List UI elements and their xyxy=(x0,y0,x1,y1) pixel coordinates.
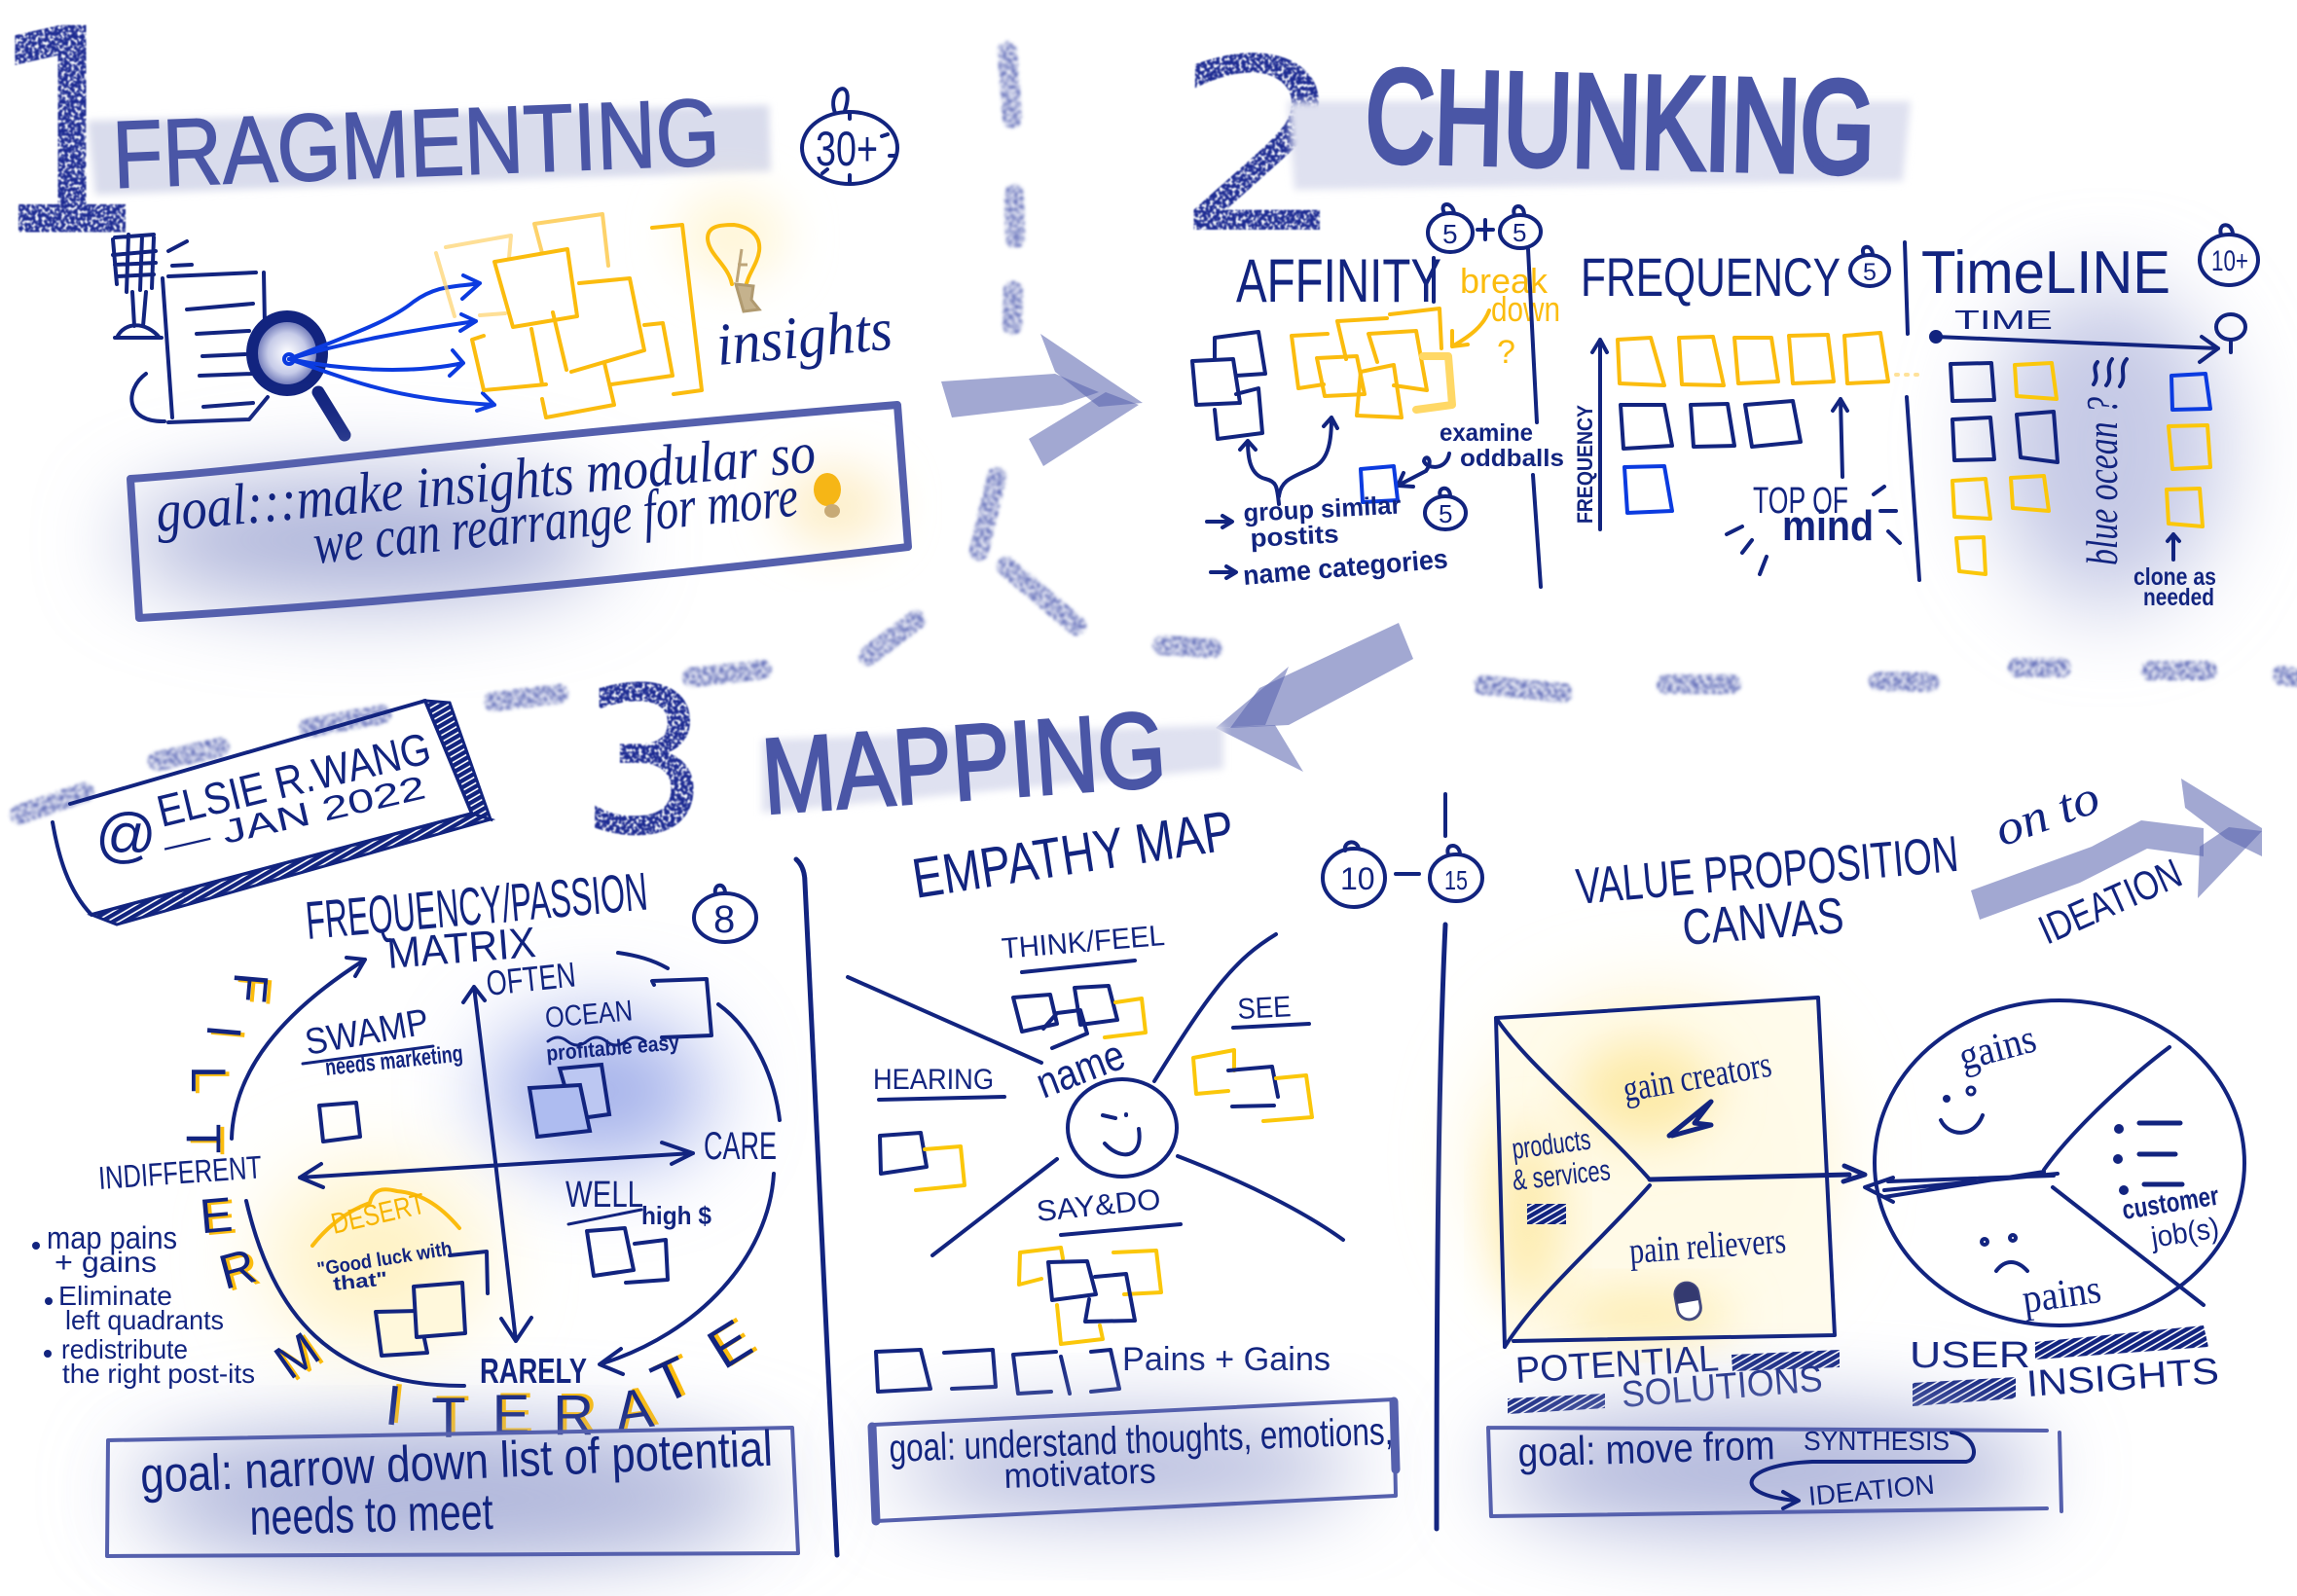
lettering: filter: L xyxy=(181,1066,236,1093)
value map square: products xyxy=(1511,1124,1592,1166)
arrows: insights extracted xyxy=(284,275,494,411)
credit banner: @ xyxy=(95,802,157,869)
icon: stopwatch 30+: 30+ xyxy=(816,122,878,176)
quadrant: ocean: profitable easy xyxy=(545,1030,681,1066)
goal callout 3c: IDEATION xyxy=(1807,1469,1936,1511)
list: filter steps: + gains xyxy=(55,1247,157,1279)
note: break down: ? xyxy=(1497,334,1515,371)
credit banner: ELSIE R.WANG xyxy=(152,722,435,837)
list: affinity steps: postits xyxy=(1250,519,1339,553)
lettering: iterate: A xyxy=(615,1374,661,1442)
note: top of mind: TOP OF xyxy=(1753,481,1848,522)
lettering: filter: I xyxy=(197,1023,251,1040)
quadrant: desert: that" xyxy=(332,1268,388,1295)
post-its: frequency navy row xyxy=(1621,401,1801,449)
note: break down: break xyxy=(1460,261,1549,301)
note: examine oddballs xyxy=(1398,419,1564,487)
quadrant: desert xyxy=(312,1188,488,1356)
arrow: step 1 to step 2 xyxy=(941,334,1143,466)
panel: step 3 mapping xyxy=(32,647,2262,1556)
post-its: yellow group xyxy=(1292,308,1452,417)
heading: value proposition canvas xyxy=(1574,826,1961,957)
icon: stopwatch 30+ xyxy=(802,89,897,184)
note: clone as needed: needed xyxy=(2143,584,2214,611)
stopwatch 8 xyxy=(694,886,756,942)
quadrant: well: WELL xyxy=(565,1175,643,1215)
note: top of mind xyxy=(1727,399,1900,574)
numeral 2: 2 xyxy=(1174,9,1347,286)
goal callout 3a xyxy=(107,1421,798,1556)
glow: iterate xyxy=(127,1431,788,1547)
axis labels: INDIFFERENT xyxy=(97,1148,263,1196)
list: filter steps: left quadrants xyxy=(65,1305,224,1335)
glow: insights bulb xyxy=(678,193,785,280)
goal callout 3a: needs to meet xyxy=(249,1484,494,1546)
note: break down xyxy=(1452,261,1560,371)
time axis: TIME xyxy=(1954,305,2053,335)
divider empathy / value proposition xyxy=(1437,925,1445,1529)
stopwatches 10 - 15: 10 xyxy=(1340,861,1375,896)
heading band xyxy=(1288,101,1911,190)
panel: step 2 chunking xyxy=(1174,9,2258,772)
user profile circle: gains xyxy=(1954,1017,2041,1080)
value map square: & services xyxy=(1511,1154,1612,1197)
post-it: blue oddball xyxy=(1361,466,1398,502)
glow: ocean quadrant xyxy=(488,1018,711,1164)
lettering: iterate: E xyxy=(697,1308,762,1381)
goal callout 1: goal:::make insights modular so xyxy=(153,420,818,544)
lettering: filter xyxy=(176,970,333,1392)
post-its: timeline navy xyxy=(1951,363,2058,462)
divider affinity / frequency xyxy=(1528,249,1541,587)
quadrant: swamp: SWAMP xyxy=(302,1001,432,1064)
post-its: yellow insight cluster xyxy=(436,214,702,417)
lettering: filter: R xyxy=(213,1238,262,1300)
background dashed divider strokes xyxy=(19,51,2297,815)
column: value proposition canvas xyxy=(1488,769,2262,1530)
icon: magnifying glass xyxy=(252,316,345,435)
lettering: iterate xyxy=(383,1306,766,1450)
arrow: on to ideation xyxy=(1971,769,2262,953)
post-it: frequency blue xyxy=(1624,466,1672,513)
stopwatch 5: 5 xyxy=(1439,499,1452,528)
note: break down: down xyxy=(1491,289,1560,329)
axis labels: OFTEN xyxy=(485,955,577,1003)
label: potential solutions: POTENTIAL xyxy=(1514,1338,1720,1392)
quadrant: ocean: OCEAN xyxy=(544,995,634,1034)
heading: mapping: MAPPING xyxy=(758,689,1170,837)
axis labels xyxy=(97,955,777,1391)
frequency axis: FREQUENCY xyxy=(1573,405,1597,524)
lettering: filter: T xyxy=(180,1126,235,1155)
matrix axes xyxy=(300,987,693,1341)
quadrant: swamp: needs marketing xyxy=(324,1040,464,1081)
lettering: iterate: T xyxy=(642,1344,701,1416)
stopwatch 5 xyxy=(1850,247,1889,286)
value map square: gain creators xyxy=(1620,1044,1774,1110)
stopwatch 5 xyxy=(1425,489,1466,529)
icon: timeline bulb xyxy=(2216,314,2245,352)
stopwatches 10 - 15: 15 xyxy=(1444,865,1468,895)
axis labels: RARELY xyxy=(480,1351,587,1391)
lettering: iterate: R xyxy=(553,1384,594,1447)
lettering: iterate: T xyxy=(435,1385,470,1448)
lettering: iterate: I xyxy=(383,1373,404,1438)
value map square xyxy=(1496,998,1865,1347)
heading: fragmenting: FRAGMENTING xyxy=(111,78,721,208)
quadrant: ocean xyxy=(529,979,711,1137)
numeral 3: 3 xyxy=(581,647,708,879)
arrow: step 2 to step 3 xyxy=(1216,623,1413,772)
glow: desert quadrant xyxy=(269,1170,483,1345)
spokes xyxy=(848,934,1343,1255)
quadrant: well xyxy=(565,1175,711,1283)
label: potential solutions xyxy=(1508,1338,1840,1416)
arrow: on to ideation: IDEATION xyxy=(2032,850,2188,953)
heading: frequency passion matrix xyxy=(304,861,650,978)
axis labels: CARE xyxy=(704,1125,777,1168)
lettering: iterate: T xyxy=(431,1387,466,1450)
label: user insights: USER xyxy=(1910,1335,2030,1376)
lettering: iterate: T xyxy=(646,1342,705,1414)
stopwatch 10+ xyxy=(2200,225,2258,285)
lettering: filter: R xyxy=(217,1240,266,1302)
note: blue ocean: blue ocean ? xyxy=(2077,397,2127,565)
heading: affinity: AFFINITY xyxy=(1236,247,1441,315)
glow: canvas xyxy=(1489,1002,1820,1314)
credit banner: — JAN 2022 xyxy=(160,769,429,865)
goal callout 3c: SYNTHESIS xyxy=(1804,1426,1950,1456)
lettering: filter: T xyxy=(176,1124,231,1153)
user profile circle xyxy=(1865,1000,2244,1325)
heading: timeline: TimeLINE xyxy=(1921,239,2170,307)
lettering: iterate: E xyxy=(496,1382,533,1445)
lettering: filter: M xyxy=(269,1324,333,1392)
cycle arrows xyxy=(232,953,780,1386)
goal callout 3b: goal: understand thoughts, emotions, xyxy=(889,1410,1394,1470)
persona face xyxy=(1030,1031,1177,1177)
user profile circle: customer xyxy=(2120,1180,2221,1225)
heading: chunking: CHUNKING xyxy=(1364,42,1877,201)
note: top of mind: mind xyxy=(1782,502,1874,550)
heading: value proposition canvas: VALUE PROPOSITION xyxy=(1574,826,1961,916)
goal callout 1: we can rearrange for more xyxy=(310,464,801,576)
list: affinity steps xyxy=(1242,490,1449,591)
list: filter steps: map pains xyxy=(47,1220,177,1255)
stopwatch 8: 8 xyxy=(713,898,735,941)
pains and gains row: Pains + Gains xyxy=(1122,1341,1331,1378)
heading band xyxy=(762,725,1223,813)
post-it: timeline blue xyxy=(2171,374,2210,410)
post-its: hearing xyxy=(880,1133,965,1190)
time axis xyxy=(1929,305,2218,362)
icon: lightbulb xyxy=(708,225,759,311)
label: hearing: HEARING xyxy=(873,1064,994,1096)
goal callout 3b xyxy=(872,1399,1396,1521)
heading: empathy map: EMPATHY MAP xyxy=(908,799,1238,911)
lettering: filter: M xyxy=(265,1322,329,1390)
goal callout 1 xyxy=(123,405,908,618)
glow: blue ocean xyxy=(1990,287,2224,608)
note: clone as needed xyxy=(2133,534,2216,611)
list: filter steps: redistribute xyxy=(61,1334,188,1364)
stopwatches 5 + 5 xyxy=(1428,204,1541,302)
lettering: filter: L xyxy=(185,1068,239,1095)
column: affinity xyxy=(1192,204,1564,591)
lettering: iterate: E xyxy=(492,1384,529,1447)
arrow: on to ideation: on to xyxy=(1987,769,2106,856)
lettering: filter: F xyxy=(222,970,278,1005)
persona face: name xyxy=(1030,1031,1131,1107)
divider matrix / empathy xyxy=(796,859,837,1555)
post-its: think feel xyxy=(1013,986,1146,1048)
lettering: filter: I xyxy=(201,1025,255,1042)
lettering: filter: F xyxy=(226,972,282,1007)
heading: value proposition canvas: CANVAS xyxy=(1680,888,1845,957)
quadrant: well: high $ xyxy=(641,1201,711,1230)
label: see: SEE xyxy=(1237,991,1292,1026)
goal callout 3c: goal: move from xyxy=(1517,1422,1775,1475)
post-its: timeline yellow xyxy=(1952,363,2210,574)
quadrant: desert: "Good luck with xyxy=(315,1238,454,1281)
user profile circle: pains xyxy=(2020,1267,2104,1323)
post-its: navy group xyxy=(1192,332,1265,439)
stopwatches 5 + 5: 5 xyxy=(1442,219,1458,249)
heading: frequency: FREQUENCY xyxy=(1581,246,1841,308)
label: user insights: INSIGHTS xyxy=(2025,1351,2220,1405)
lettering: filter: E xyxy=(201,1189,238,1246)
credit banner xyxy=(53,701,491,925)
lettering: filter: E xyxy=(198,1187,235,1244)
label: insights: insights xyxy=(713,297,895,379)
list: affinity steps: group similar xyxy=(1243,490,1402,527)
column: frequency xyxy=(1573,246,1921,574)
column: empathy map xyxy=(848,794,1482,1521)
goal callout 3c xyxy=(1488,1413,2061,1530)
note: examine oddballs: examine xyxy=(1440,419,1533,447)
label: think feel: THINK/FEEL xyxy=(1001,920,1166,965)
heading: frequency passion matrix: FREQUENCY/PASSION xyxy=(304,861,650,951)
list: affinity steps: name categories xyxy=(1242,543,1449,591)
panel: step 1 fragmenting xyxy=(0,0,1143,618)
list: filter steps: the right post-its xyxy=(62,1359,255,1389)
frequency axis xyxy=(1573,340,1607,529)
lettering: iterate: E xyxy=(701,1306,766,1379)
divider frequency / timeline xyxy=(1905,242,1919,580)
post-its: see xyxy=(1193,1050,1312,1121)
quadrant: swamp xyxy=(302,1001,464,1142)
post-its: frequency yellow row xyxy=(1618,333,1921,385)
stopwatches 5 + 5: 5 xyxy=(1513,218,1526,247)
label: say and do: SAY&DO xyxy=(1035,1183,1162,1228)
stopwatches 10 - 15 xyxy=(1323,794,1482,907)
list: filter steps: Eliminate xyxy=(58,1281,172,1311)
goal callout 3b: motivators xyxy=(1003,1451,1156,1496)
list: filter steps xyxy=(32,1220,255,1389)
note: clone as needed: clone as xyxy=(2133,563,2216,591)
arrows: group similar xyxy=(1207,417,1337,578)
label: potential solutions: SOLUTIONS xyxy=(1620,1359,1824,1416)
stopwatch 5: 5 xyxy=(1863,259,1877,286)
lettering: iterate: R xyxy=(557,1382,598,1445)
lettering: iterate: A xyxy=(611,1376,657,1444)
label: user insights xyxy=(1910,1325,2220,1406)
user profile circle: job(s) xyxy=(2148,1212,2221,1254)
note: examine oddballs: oddballs xyxy=(1460,445,1564,472)
column: timeline xyxy=(1921,225,2258,611)
column: frequency passion matrix xyxy=(32,861,798,1556)
post-its: say and do xyxy=(1019,1248,1161,1344)
heading band xyxy=(88,105,771,195)
quadrant: desert: DESERT xyxy=(328,1188,428,1241)
value map square: pain relievers xyxy=(1628,1220,1787,1272)
lettering: iterate: I xyxy=(386,1371,408,1436)
heading: frequency passion matrix: MATRIX xyxy=(385,919,537,978)
pains and gains row xyxy=(876,1341,1331,1394)
icon: document scroll with quill xyxy=(113,235,268,422)
goal callout 3a: goal: narrow down list of potential xyxy=(139,1421,774,1505)
stopwatch 10+: 10+ xyxy=(2211,245,2248,277)
